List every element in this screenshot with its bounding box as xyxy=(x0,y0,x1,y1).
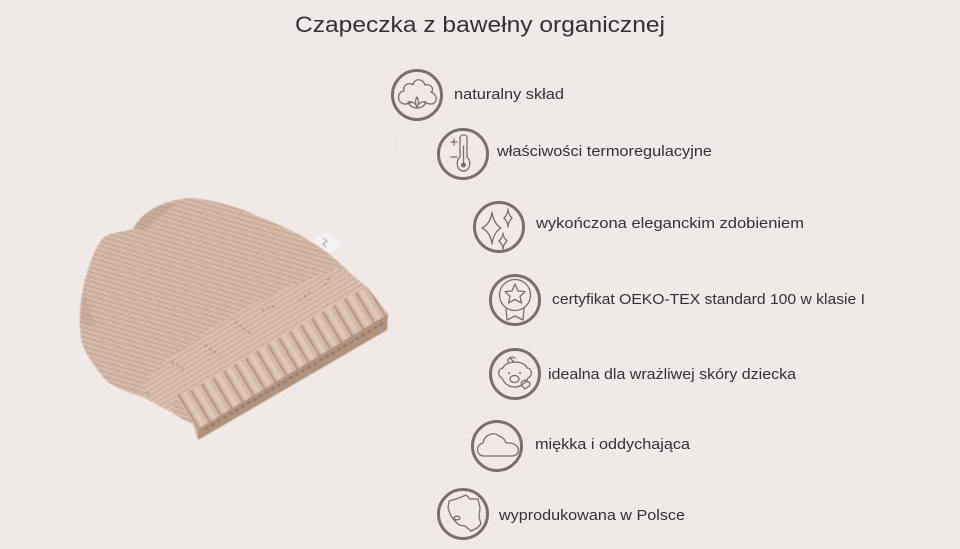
feature: sensitive skin xyxy=(490,350,797,398)
label: właściwości termoregulacyjne xyxy=(496,143,712,160)
label: idealna dla wrażliwej skóry dziecka xyxy=(548,366,797,383)
side fold shadow xyxy=(81,292,96,326)
icon: cotton xyxy=(392,70,442,120)
faint mark xyxy=(396,132,398,152)
feature: natural composition xyxy=(392,70,564,120)
feature: soft and breathable xyxy=(472,422,691,470)
feature: made in Poland xyxy=(438,490,685,538)
feature: thermoregulation xyxy=(438,130,712,178)
icon: baby face xyxy=(490,350,540,398)
icon: sparkles xyxy=(474,202,524,252)
label: certyfikat OEKO-TEX standard 100 w klasie I xyxy=(552,291,865,308)
product photo: knitted hat xyxy=(80,198,388,440)
feature: elegant finish xyxy=(474,202,804,252)
hat body xyxy=(80,198,388,440)
label tag xyxy=(313,232,342,254)
openwork holes xyxy=(147,277,330,395)
label: wykończona eleganckim zdobieniem xyxy=(535,215,804,232)
title: Czapeczka z bawełny organicznej xyxy=(295,12,665,37)
icon: map of Poland xyxy=(438,490,488,538)
openwork band xyxy=(142,268,368,413)
label: wyprodukowana w Polsce xyxy=(498,507,685,524)
icon: rosette badge xyxy=(490,276,540,324)
icon: thermometer xyxy=(438,130,488,178)
icon: cloud xyxy=(472,422,522,470)
feature: certificate xyxy=(490,276,865,324)
label: naturalny skład xyxy=(454,86,564,103)
inner cuff xyxy=(198,313,388,440)
ribbed cuff xyxy=(175,287,388,429)
label: miękka i oddychająca xyxy=(535,436,691,453)
crown fold shadow xyxy=(133,203,178,230)
